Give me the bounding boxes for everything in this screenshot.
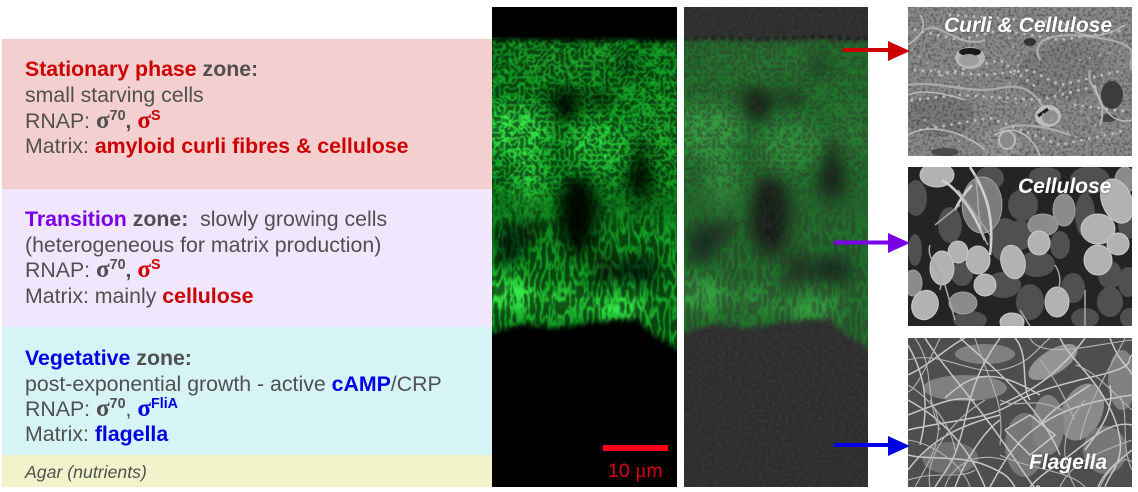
- dark background cells: [905, 166, 1138, 329]
- cell with hole, lower: [1035, 105, 1061, 127]
- SEM image: flagella: [908, 338, 1132, 487]
- label: curli and cellulose: Curli & Cellulose: [944, 14, 1112, 37]
- cell with hole, upper: [955, 47, 985, 69]
- heading: stationary phase zone: Stationary phase zone:: [25, 57, 258, 81]
- arrow: stationary zone to curli and cellulose: [843, 41, 910, 61]
- bright cells: [907, 163, 1138, 331]
- arrow: vegetative zone to flagella: [834, 436, 910, 456]
- panel: stationary phase zone: [2, 39, 492, 189]
- scale bar: [603, 445, 668, 482]
- SEM image: curli and cellulose: [908, 7, 1132, 156]
- text: RNAP sigma factors: RNAP: σ70, σFliA: [25, 395, 178, 422]
- text: post-exponential growth: post-exponential growth - active cAMP/CRP: [25, 372, 442, 396]
- biofilm merged signal: [684, 36, 868, 351]
- arrow: transition zone to cellulose: [834, 233, 910, 253]
- bacterial cell bodies: [922, 337, 1136, 477]
- text: agar nutrients: Agar (nutrients): [25, 462, 147, 482]
- text: matrix composition: Matrix: amyloid curli fibres & cellulose: [25, 134, 408, 158]
- grey cells: [904, 167, 1135, 314]
- scale bar: 10 µm: [608, 460, 663, 482]
- panel: agar: [2, 455, 492, 487]
- text: RNAP sigma factors: RNAP: σ70, σS: [25, 107, 161, 134]
- flagella filaments: [908, 338, 1132, 489]
- biofilm fluorescence signal: [492, 36, 677, 352]
- text: matrix composition: Matrix: flagella: [25, 422, 168, 446]
- text: heterogeneous matrix production: (heterogeneous for matrix production): [25, 233, 381, 257]
- microscopy panel: green fluorescence: [492, 7, 677, 487]
- microscopy panel: fluorescence over phase contrast: [684, 7, 868, 487]
- text: RNAP sigma factors: RNAP: σ70, σS: [25, 256, 161, 283]
- text: matrix composition: Matrix: mainly cellulose: [25, 284, 253, 308]
- label: cellulose: Cellulose: [1018, 175, 1111, 198]
- panel: transition zone: [2, 189, 492, 327]
- heading: vegetative zone: Vegetative zone:: [25, 346, 192, 370]
- text: small starving cells: small starving cells: [25, 83, 204, 107]
- label: flagella: Flagella: [1029, 451, 1107, 474]
- panel: vegetative zone: [2, 327, 492, 455]
- heading: transition zone: Transition zone: slowly growing cells: [25, 207, 387, 231]
- SEM image: cellulose: [908, 167, 1132, 326]
